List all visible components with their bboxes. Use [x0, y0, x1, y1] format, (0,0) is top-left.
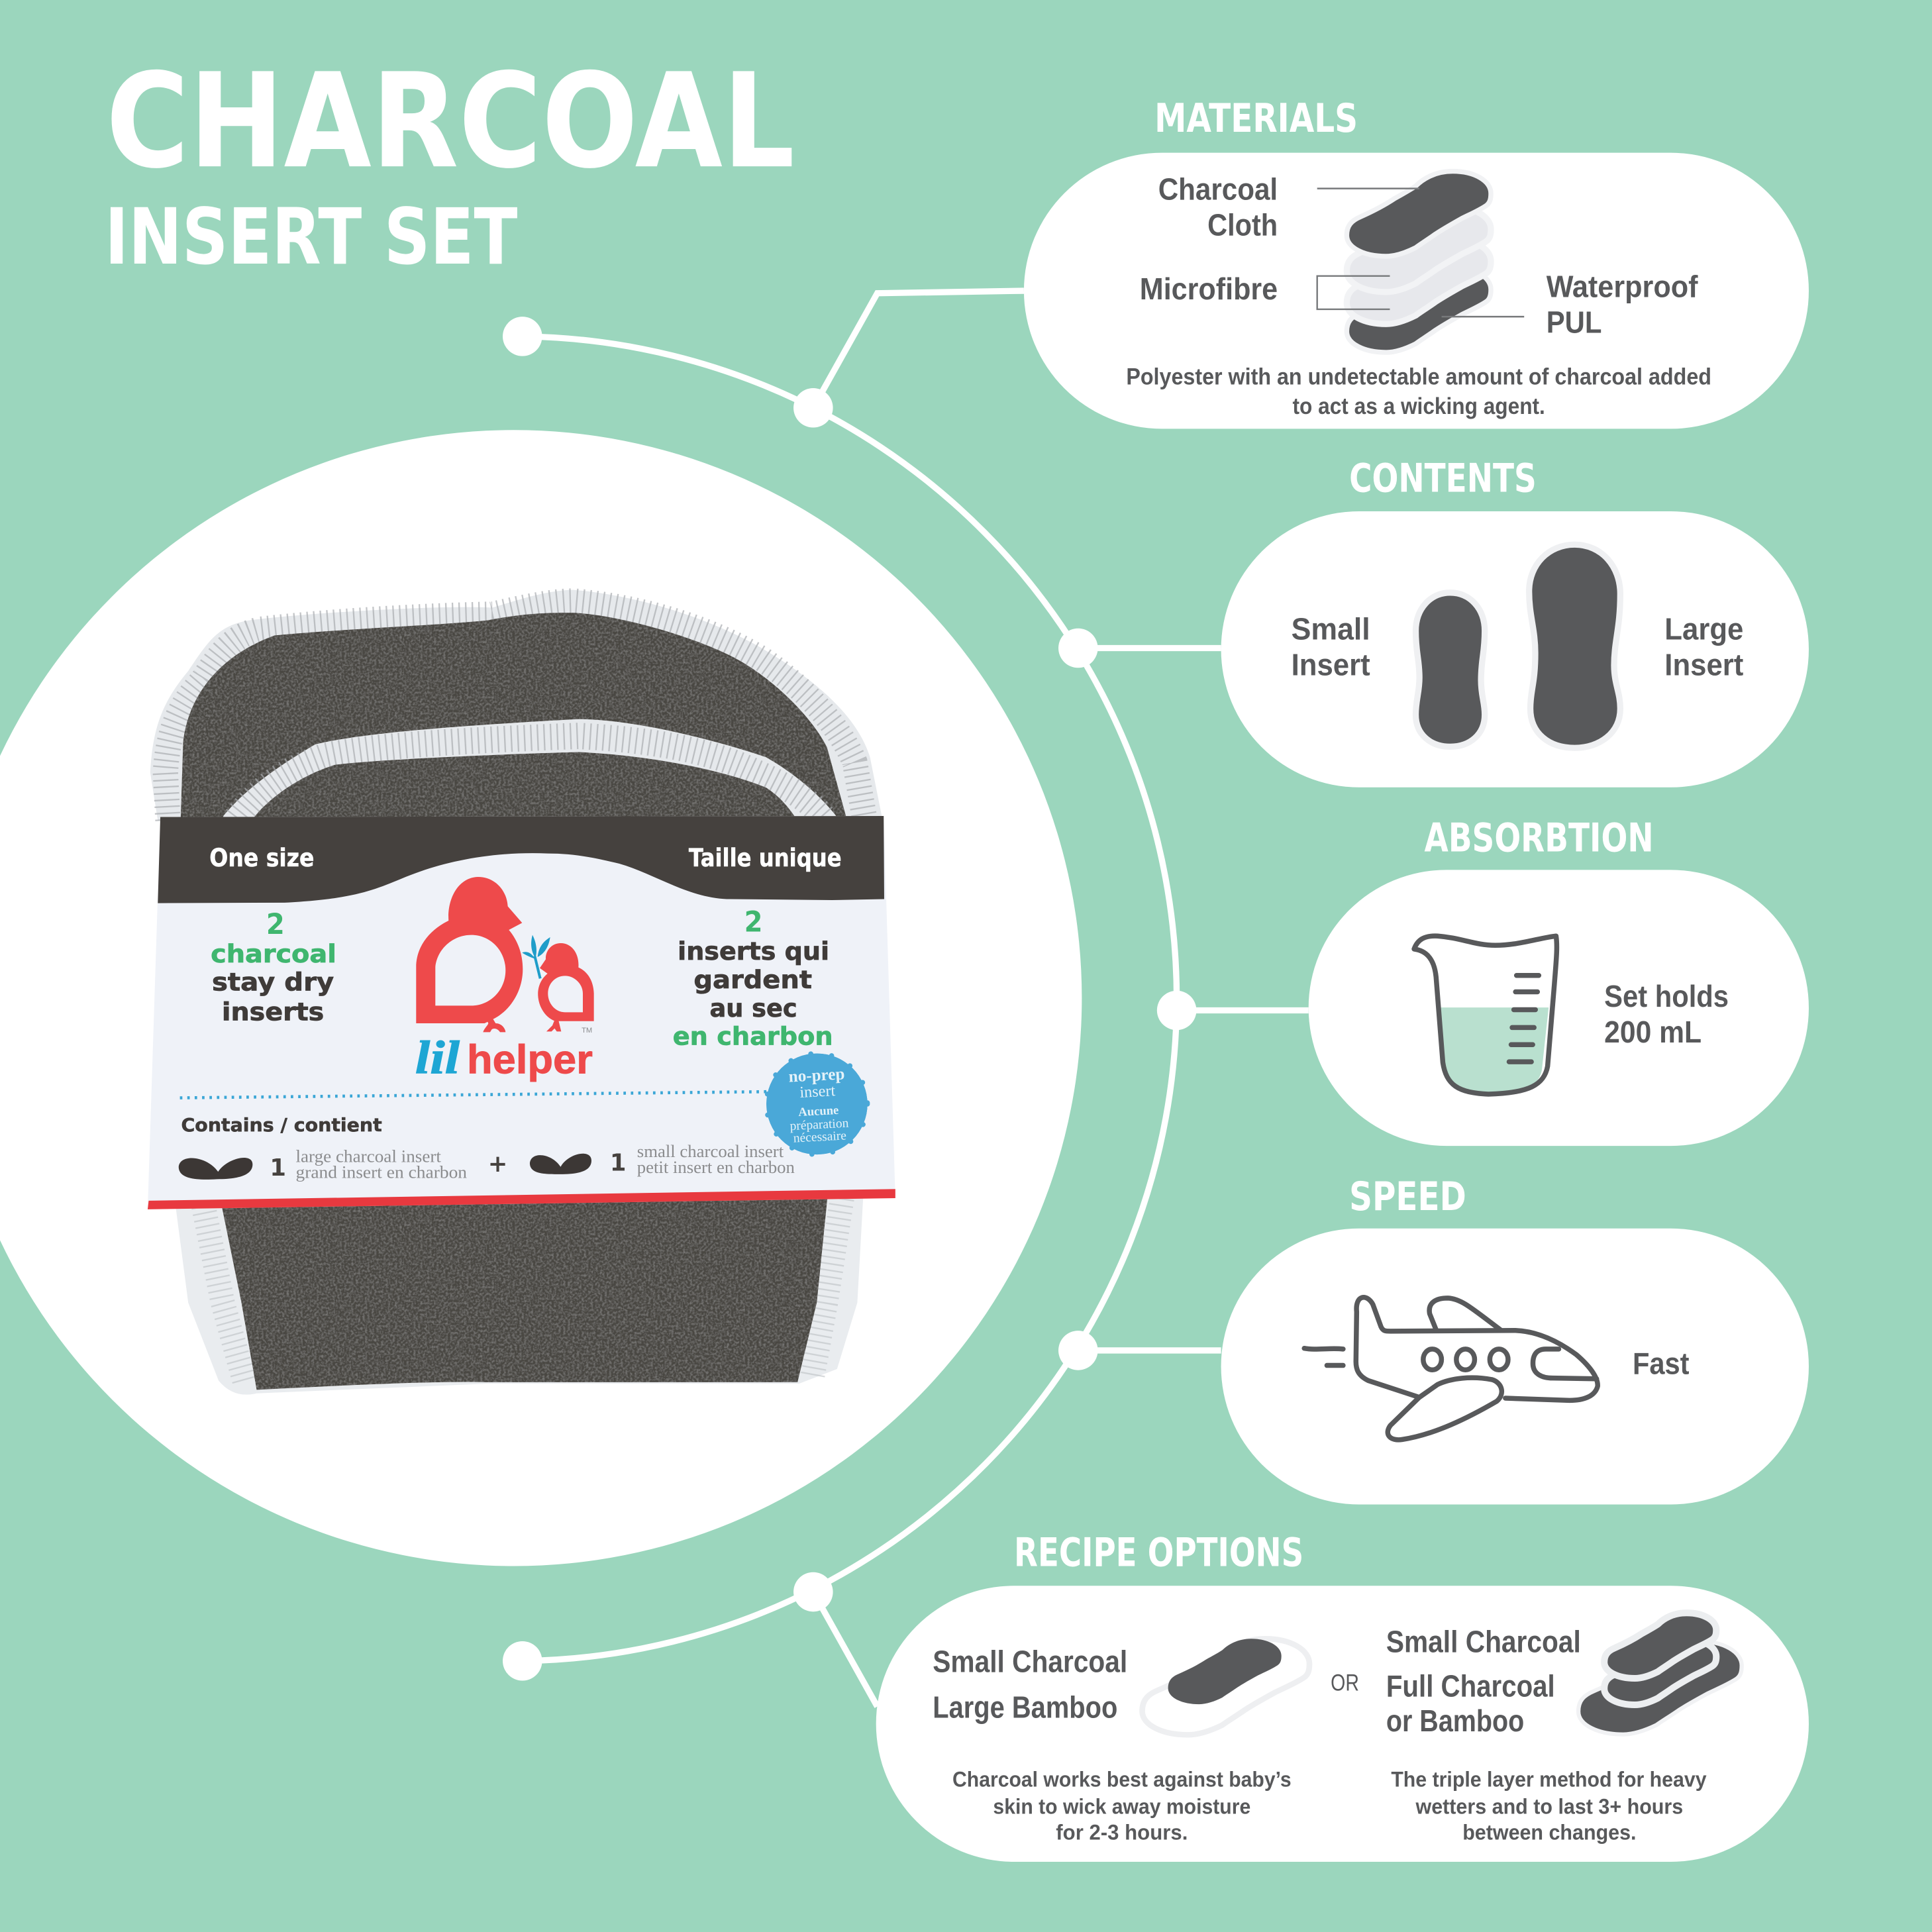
title: INSERT SET [105, 191, 517, 282]
english product text: inserts [222, 997, 324, 1026]
labels: layers: PUL [1547, 305, 1602, 339]
french product text [673, 905, 833, 1051]
title: CHARCOAL [106, 45, 795, 197]
lil helper logo: helper [467, 1037, 593, 1082]
labels: layers [1140, 172, 1698, 339]
panel: materials [1024, 96, 1809, 429]
panel: absorbtion [1309, 815, 1809, 1146]
heading: recipe options: RECIPE OPTIONS [1014, 1530, 1303, 1576]
label: fast: Fast [1633, 1346, 1690, 1380]
option one description: for 2-3 hours. [1056, 1820, 1188, 1844]
option two description [1391, 1767, 1707, 1844]
materials pill [1024, 153, 1809, 429]
labels: insert sizes: Small [1292, 612, 1370, 646]
large insert top [150, 590, 883, 821]
small insert top [221, 719, 840, 821]
materials description [1126, 364, 1711, 419]
labels: insert sizes: Insert [1292, 647, 1370, 682]
icon: small insert [1416, 593, 1485, 746]
option two labels [1386, 1625, 1581, 1738]
panel: contents [1221, 456, 1809, 788]
heading: absorbtion: ABSORBTION [1425, 815, 1654, 861]
contents line: small charcoal insert [637, 1142, 784, 1161]
recipe pill [876, 1586, 1809, 1862]
option two labels: Full Charcoal [1386, 1669, 1555, 1703]
label red strip [148, 1189, 895, 1209]
materials description: to act as a wicking agent. [1292, 393, 1545, 419]
label: capacity [1604, 979, 1729, 1049]
option one labels [933, 1644, 1127, 1724]
contents line: 1 [610, 1149, 626, 1176]
timeline arc with connectors [503, 291, 1309, 1707]
english product text [211, 908, 336, 1026]
label header text: Taille unique [689, 843, 842, 872]
lil helper logo: TM [582, 1027, 592, 1035]
label header text [209, 843, 842, 872]
labels: insert sizes: Insert [1664, 647, 1743, 682]
french product text: au sec [710, 993, 797, 1023]
french product text: en charbon [673, 1022, 833, 1051]
or label: OR [1331, 1670, 1359, 1696]
label header text: One size [209, 843, 314, 872]
label sleeve [148, 816, 895, 1209]
label: capacity: 200 mL [1604, 1015, 1702, 1049]
contents line: + [488, 1150, 507, 1178]
icon: small charcoal on large bamboo [1143, 1639, 1309, 1735]
labels: layers: Waterproof [1547, 269, 1698, 303]
contents line: large charcoal insert [295, 1146, 442, 1166]
badge: no-prep insert: no-prep [788, 1065, 845, 1086]
badge: no-prep insert: nécessaire [793, 1129, 846, 1146]
labels: layers: Charcoal [1158, 172, 1278, 206]
contents pill [1221, 511, 1809, 788]
lil helper logo [415, 877, 594, 1084]
french product text: gardent [693, 965, 812, 994]
badge: no-prep insert: préparation [789, 1117, 849, 1133]
option one labels: Small Charcoal [933, 1644, 1127, 1678]
icon: triple layer stack [1578, 1613, 1742, 1735]
french product text: 2 [744, 905, 763, 939]
english product text: stay dry [212, 968, 334, 997]
lower part of inserts [176, 1193, 864, 1395]
product photo: charcoal inserts in packaging [148, 590, 895, 1395]
title [105, 45, 795, 282]
option two description: between changes. [1462, 1820, 1637, 1844]
option two description: The triple layer method for heavy [1391, 1767, 1707, 1791]
labels: layers: Cloth [1207, 207, 1278, 242]
option two labels: or Bamboo [1386, 1703, 1524, 1738]
option one description: Charcoal works best against baby’s [952, 1767, 1292, 1791]
contents line: Contains / contient [181, 1114, 382, 1136]
option two labels: Small Charcoal [1386, 1625, 1581, 1659]
badge: no-prep insert: Aucune [798, 1103, 839, 1119]
french product text: inserts qui [678, 937, 829, 966]
labels: layers: Microfibre [1140, 272, 1278, 306]
badge: no-prep insert [766, 1054, 868, 1154]
english product text: 2 [266, 908, 285, 941]
option one description [952, 1767, 1292, 1844]
icon: layered pads [1347, 172, 1491, 352]
heading: materials: MATERIALS [1154, 96, 1358, 142]
label: capacity: Set holds [1604, 979, 1729, 1013]
contents line: grand insert en charbon [295, 1162, 467, 1182]
absorbtion pill [1309, 870, 1809, 1146]
option one description: skin to wick away moisture [993, 1794, 1250, 1818]
speed pill [1221, 1229, 1809, 1504]
option one labels: Large Bamboo [933, 1690, 1117, 1724]
icon: large insert [1529, 544, 1620, 748]
contents line: 1 [270, 1154, 286, 1182]
panel: speed [1221, 1174, 1809, 1504]
label dark header band [158, 816, 884, 903]
contents line: petit insert en charbon [637, 1158, 795, 1177]
materials description: Polyester with an undetectable amount of charcoal added [1126, 364, 1711, 389]
labels: insert sizes [1292, 612, 1743, 682]
dotted divider [180, 1092, 766, 1098]
english product text: charcoal [211, 939, 336, 968]
contents line [179, 1114, 795, 1182]
icon: airplane [1304, 1297, 1598, 1440]
badge: no-prep insert: insert [799, 1082, 836, 1101]
icon: measuring cup [1414, 936, 1556, 1094]
panel: recipe options [876, 1530, 1809, 1862]
lil helper logo: lil [415, 1032, 460, 1084]
product circle background [0, 430, 1082, 1566]
labels: insert sizes: Large [1664, 612, 1743, 646]
heading: contents: CONTENTS [1349, 456, 1537, 501]
option two description: wetters and to last 3+ hours [1415, 1794, 1683, 1818]
heading: speed: SPEED [1349, 1174, 1466, 1220]
